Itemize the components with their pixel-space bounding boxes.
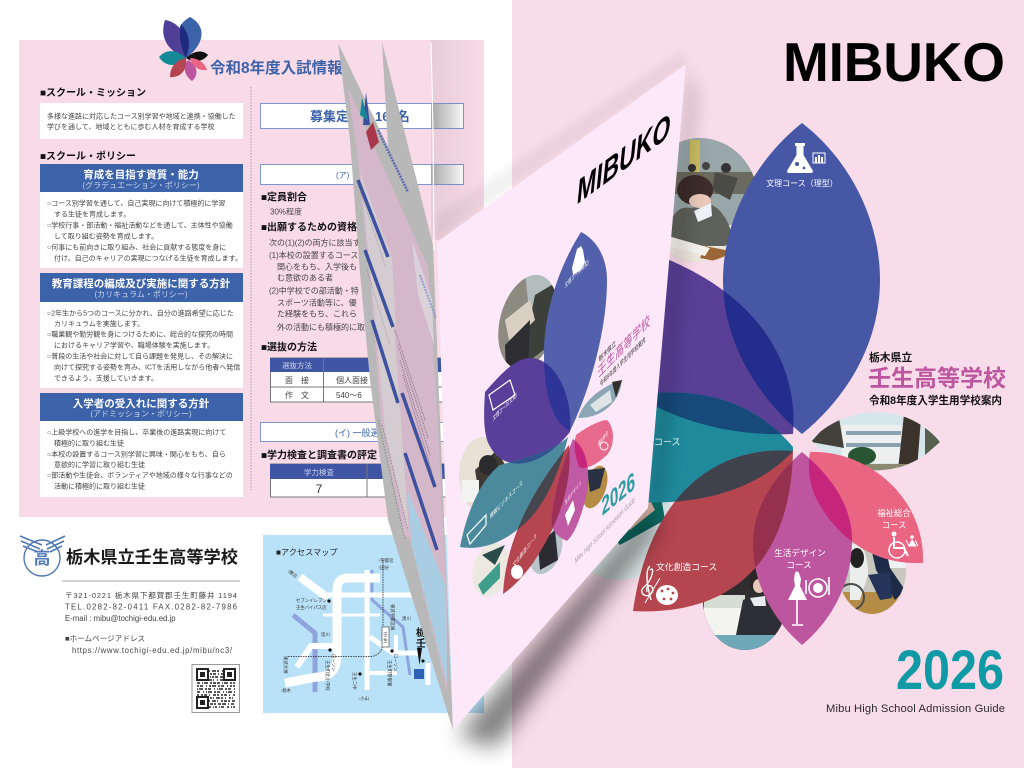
petal: life design course bbox=[753, 452, 852, 645]
table: selection method: 個人面接 bbox=[336, 375, 368, 385]
label: humanities course: 文理コース（文型） bbox=[595, 281, 670, 291]
panel: graduation policy bbox=[40, 164, 243, 268]
mini year 2026: 2026 bbox=[601, 466, 636, 522]
panel: curriculum policy bbox=[40, 273, 243, 388]
heading: school name: 栃木県立壬生高等学校 bbox=[66, 547, 238, 567]
panel: access map: ↑宇都宮 bbox=[378, 557, 394, 564]
panel: access map: 壬生町北小学校 bbox=[324, 660, 331, 691]
photo: computer room bbox=[592, 502, 672, 580]
icon: treble clef and palette bbox=[642, 566, 678, 605]
mini labels and icons: 文理コース(理型) bbox=[565, 256, 589, 290]
label: life design course: 生活デザイン bbox=[774, 547, 826, 558]
photo: students studying bbox=[670, 138, 754, 262]
mini labels and icons: 文理コース(文型) bbox=[493, 389, 517, 423]
text block: school mission: 学びを通して、地域とともに歩む人材を育成する学校 bbox=[47, 122, 214, 131]
text: guide subtitle: Mibu High School Admission Guide bbox=[826, 703, 1005, 715]
policy header bars bbox=[358, 180, 437, 550]
panel: access map: ローソン bbox=[393, 654, 398, 672]
text block: eligibility: スポーツ活動等に、優 bbox=[277, 298, 357, 308]
mini petal: business bbox=[460, 437, 568, 548]
panel: access map: 黒川 bbox=[402, 616, 411, 622]
panel: admission policy: ○部活動や生徒会、ボランティアや地域の様々な行事などの bbox=[47, 470, 233, 480]
label: life design course: コース bbox=[786, 560, 812, 570]
table: selection method: 540〜6 bbox=[336, 391, 362, 400]
label: welfare course bbox=[877, 508, 911, 530]
text block: address and contact: 〒321-0221 栃木県下都賀郡壬生町藤井 1194 bbox=[65, 590, 237, 600]
mini subtitle: Mibu High School Admission Guide bbox=[575, 496, 635, 566]
pale text panels bbox=[360, 172, 409, 535]
petal overlap: purple and blue bbox=[723, 290, 794, 426]
panel: curriculum policy: (カリキュラム・ポリシー) bbox=[94, 290, 188, 299]
mini petal: humanities bbox=[484, 358, 570, 464]
panel: access map: ↑国分 bbox=[378, 564, 390, 571]
QR code bbox=[192, 664, 240, 712]
icon: flower logo bbox=[159, 17, 208, 81]
panel: access map: ローソン bbox=[331, 654, 336, 672]
panel: graduation policy: する生徒を育成します。 bbox=[54, 210, 130, 218]
panel: front cover of brochure bbox=[437, 64, 686, 730]
photo: sewing student bbox=[703, 568, 782, 650]
panel: cover photos bbox=[565, 135, 945, 655]
mini photo: wheelchair bbox=[578, 463, 612, 511]
panel: access map: 東武大塚 bbox=[282, 656, 289, 674]
text block: school mission bbox=[40, 103, 243, 139]
heading: year 2026: 2026 bbox=[896, 638, 1004, 701]
mini photo: building bbox=[578, 380, 622, 418]
panel: admission policy: (アドミッション・ポリシー) bbox=[90, 410, 192, 418]
mini labels and icons: 福祉総合 bbox=[598, 428, 608, 448]
mini overlap: life design and culture bbox=[552, 448, 570, 528]
table: academic test: 7 bbox=[316, 482, 323, 496]
mini overlap: science and humanities bbox=[544, 362, 570, 431]
text block: eligibility: (1)本校の設置するコース bbox=[269, 250, 358, 260]
text block: address and contact: https://www.tochigi-edu.ed.jp/mibu/nc3/ bbox=[72, 646, 233, 655]
text block: eligibility: 次の(1)(2)の両方に該当する者 bbox=[269, 238, 377, 248]
label: culture creation course: 文化創造コース bbox=[656, 561, 717, 572]
panel: access map: セブンイレブン bbox=[296, 597, 327, 603]
table: selection method bbox=[270, 358, 451, 402]
mini overlap: welfare and life design bbox=[574, 440, 588, 468]
label: life design course bbox=[774, 547, 826, 570]
text block: eligibility: ■出願するための資格 bbox=[261, 220, 357, 234]
panel: admission policy: 積極的に取り組む生徒 bbox=[54, 438, 124, 448]
panel: graduation policy: ○コース別学習を通して、自己実現に向けて積極的に学習 bbox=[47, 198, 225, 208]
section box: (イ) general selection: (イ) 一般選抜 bbox=[335, 427, 388, 438]
chart: course flower bbox=[633, 123, 923, 645]
label: business course: 情報ビジネスコース bbox=[600, 436, 681, 447]
inner page tint bbox=[348, 88, 447, 690]
panel: admission policy: ○本校の設置するコース別学習に興味・関心をもち、自ら bbox=[47, 450, 226, 458]
text block: eligibility: む意欲のある者 bbox=[277, 272, 333, 282]
mini overlap: business and humanities bbox=[509, 443, 560, 464]
panel: graduation policy: ○学校行事・部活動・福祉活動などを通して、主体性や協働 bbox=[47, 220, 233, 230]
heading: selection method: ■選抜の方法 bbox=[261, 340, 317, 354]
panel: access map: 壬 bbox=[416, 637, 426, 650]
text block: eligibility: (2)中学校での部活動・特 bbox=[269, 286, 359, 296]
panel: curriculum policy: ○普段の生活や社会に対して自ら課題を発見し、その解決に bbox=[47, 352, 233, 360]
text block: address and contact bbox=[65, 590, 237, 655]
panel: graduation policy: 育成を目指す資質・能力 bbox=[83, 168, 199, 181]
icon: flask bbox=[787, 143, 825, 173]
mini school name: 栃木県立 bbox=[599, 337, 616, 364]
petal: welfare course bbox=[809, 452, 923, 563]
mini labels and icons bbox=[467, 246, 608, 579]
mini photo: computer room bbox=[459, 437, 507, 513]
panel: graduation policy: 付け、自己のキャリアの実現につなげる生徒を育成します。 bbox=[54, 254, 242, 262]
mini photo: sewing bbox=[523, 521, 569, 579]
panel: admission policy: 意欲的に学習に取り組む生徒 bbox=[54, 460, 145, 469]
panel: curriculum policy: ○2年生から5つのコースに分かれ、自分の進路希望に応じた bbox=[47, 308, 234, 318]
mini petal: welfare bbox=[575, 420, 613, 468]
petal: bunri humanities course bbox=[537, 228, 794, 434]
panel: admission policy: 入学者の受入れに関する方針 bbox=[73, 397, 210, 410]
table: academic test: 学力検査 bbox=[304, 467, 334, 477]
section box: (ア): (ア) bbox=[336, 171, 350, 180]
heading: MIBUKO title: MIBUKO bbox=[783, 31, 1005, 93]
panel: graduation policy: して取り組む姿勢を育成します。 bbox=[54, 232, 158, 240]
photo: school building bbox=[811, 412, 940, 470]
mini school name: 令和8年度入学生用学校案内 bbox=[600, 335, 646, 389]
table: selection method: 選抜方法 bbox=[282, 360, 312, 370]
panel: admission information sheet bbox=[19, 17, 484, 517]
panel: access map: 思川 bbox=[321, 632, 330, 637]
text block: school title: 栃木県立 bbox=[869, 350, 912, 364]
panel: access map: 壬生バイパス店 bbox=[296, 604, 327, 611]
panel: access map: ↓栃木 bbox=[280, 687, 292, 694]
text block: address and contact: ■ホームページアドレス bbox=[65, 634, 145, 643]
mini petal: science bbox=[544, 232, 607, 431]
petal overlap: magenta and pink bbox=[808, 458, 852, 542]
text block: quota bbox=[261, 190, 307, 216]
petal: culture creation course bbox=[633, 450, 793, 611]
petal: bunri science course bbox=[723, 123, 880, 434]
text block: eligibility bbox=[261, 220, 377, 332]
faint page text bbox=[395, 330, 432, 472]
panel: curriculum policy: ○職業観や勤労観を身につけるために、総合的な探究の時間 bbox=[47, 330, 233, 338]
section box: (イ) general selection bbox=[260, 422, 464, 442]
text block: school title: 令和8年度入学生用学校案内 bbox=[869, 394, 1002, 407]
text block: eligibility: 外の活動にも積極的に取 bbox=[277, 322, 365, 332]
panel: access map bbox=[263, 535, 484, 713]
petal overlap: teal and purple bbox=[656, 392, 781, 434]
text block: address and contact: TEL.0282-82-0411 FAX.0282-82-7986 bbox=[65, 602, 237, 612]
label: science course: 文理コース（理型） bbox=[766, 178, 838, 188]
panel: access map: ↑鹿沼 bbox=[286, 567, 299, 580]
panel: curriculum policy: カリキュラムを実施します。 bbox=[54, 319, 144, 328]
label: welfare course: 福祉総合 bbox=[877, 508, 911, 518]
callout: enrollment capacity: 募集定員 160名 bbox=[310, 109, 410, 124]
mini photo: workshop bbox=[467, 539, 515, 601]
panel: curriculum policy: 向けて探究する姿勢を育み、ICTを活用しながら他者へ発信 bbox=[54, 362, 240, 372]
petal overlap: teal and red bbox=[674, 450, 793, 502]
table: selection method: 面 接 bbox=[285, 375, 309, 385]
text block: quota: 30%程度 bbox=[270, 206, 302, 216]
mini labels and icons: 生活デザイン bbox=[565, 478, 582, 507]
text block: school title: 壬生高等学校 bbox=[868, 365, 1006, 391]
panel: access map: 生 bbox=[383, 637, 388, 643]
callout: enrollment capacity bbox=[260, 104, 464, 128]
section box: (ア) bbox=[260, 164, 464, 184]
folded page flower logo bbox=[360, 92, 379, 150]
panel: admission policy: 活動に積極的に取り組む生徒 bbox=[54, 482, 145, 490]
panel: admission policy: ○上級学校への進学を目指し、卒業後の進路実現に向けて bbox=[47, 428, 226, 436]
text block: school title bbox=[868, 350, 1006, 407]
mini overlap: culture and business bbox=[518, 450, 564, 530]
table: academic test bbox=[270, 464, 451, 497]
panel: access map: 壬生二中 bbox=[351, 672, 358, 690]
panel: access map: ↓小山 bbox=[358, 695, 369, 702]
panel: curriculum policy: におけるキャリア学習や、職場体験を実施します。 bbox=[54, 340, 214, 350]
mini labels and icons: 文化創造コース bbox=[513, 531, 537, 570]
folded map bbox=[407, 490, 447, 683]
mini photo: students bbox=[498, 275, 554, 366]
text block: eligibility: 関心をもち、入学後も bbox=[277, 262, 357, 272]
panel: admission policy bbox=[40, 393, 243, 497]
text block: school mission: 多様な進路に対応したコース別学習や地域と連携・協働した bbox=[47, 112, 236, 120]
heading: mini MIBUKO: MIBUKO bbox=[575, 103, 673, 213]
panel: folded inner pages bbox=[338, 42, 453, 730]
panel: graduation policy: (グラデュエーション・ポリシー) bbox=[82, 180, 200, 190]
label: welfare course: コース bbox=[882, 520, 906, 530]
text block: address and contact: E-mail : mibu@tochigi-edu.ed.jp bbox=[65, 614, 176, 623]
icon: dress and dish bbox=[788, 571, 829, 625]
panel: curriculum policy: できるよう、支援していきます。 bbox=[54, 374, 158, 382]
text block: eligibility: た経験をもち、これら bbox=[277, 308, 357, 318]
heading: 令和8年度入試情報: 令和8年度入試情報 bbox=[210, 58, 343, 77]
heading: academic test: ■学力検査と調査書の評定 bbox=[261, 448, 377, 462]
panel: access map: 壬生町警察署 bbox=[386, 660, 393, 687]
panel: graduation policy: ○何事にも前向きに取り組み、社会に貢献する態度を身に bbox=[47, 242, 226, 252]
petal: business course bbox=[490, 392, 793, 502]
mini school name: 壬生高等学校 bbox=[597, 311, 650, 381]
mini petal: culture bbox=[503, 445, 570, 594]
heading: school policy: ■スクール・ポリシー bbox=[40, 150, 136, 162]
heading: school mission: ■スクール・ミッション bbox=[40, 87, 146, 99]
shadows and fold highlights bbox=[431, 40, 698, 748]
icon: wheelchair bbox=[889, 532, 918, 558]
mini petal: life design bbox=[551, 439, 588, 541]
icon: school emblem: 高 bbox=[34, 548, 50, 568]
panel: access map: 壬 bbox=[383, 631, 388, 637]
text block: quota: ■定員割合 bbox=[261, 190, 307, 204]
petal overlap: red and magenta bbox=[753, 460, 793, 568]
panel: access map: 栃 bbox=[416, 626, 426, 639]
icon: school emblem bbox=[20, 536, 65, 576]
panel: curriculum policy: 教育課程の編成及び実施に関する方針 bbox=[52, 277, 231, 290]
panel: access map: ■アクセスマップ bbox=[276, 548, 338, 557]
mini labels and icons: 情報ビジネスコース bbox=[490, 478, 523, 521]
photo: wheelchair practice bbox=[842, 542, 906, 614]
table: selection method: 作 文 bbox=[285, 390, 309, 400]
panel: access map: 東武宇都宮線 bbox=[389, 604, 396, 631]
